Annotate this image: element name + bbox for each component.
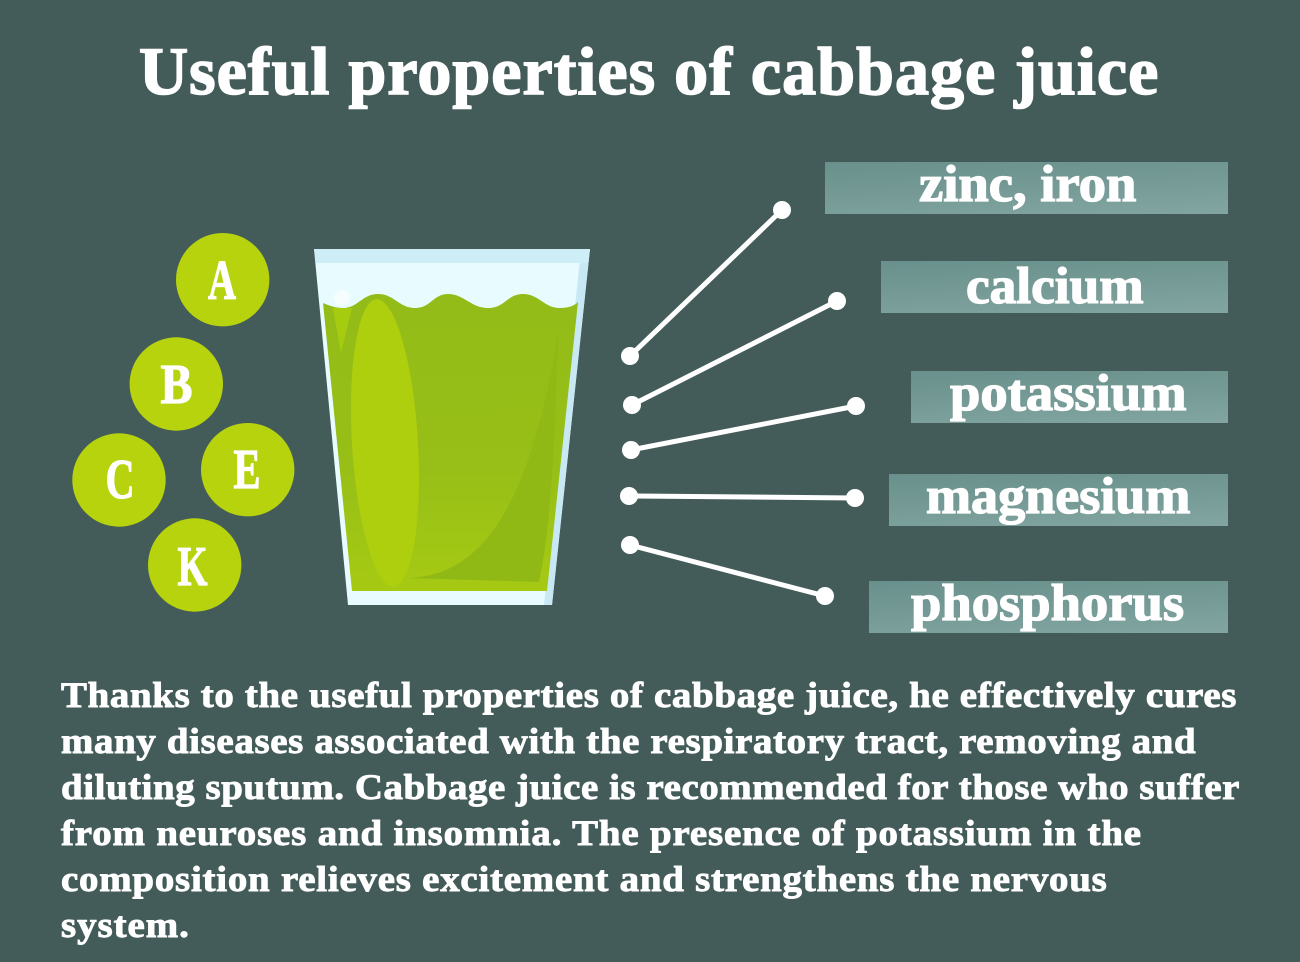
vitamin A: A <box>208 250 236 312</box>
vitamin E: E <box>234 439 260 501</box>
description text: from neuroses and insomnia. The presence of potassium in the <box>61 813 1142 853</box>
vitamin C: C <box>106 449 134 511</box>
vitamin K: K <box>178 536 208 598</box>
mineral label: potassium <box>911 371 1228 423</box>
mineral label: calcium: calcium <box>966 258 1144 315</box>
vitamin B: B <box>160 354 192 416</box>
vitamin C <box>72 433 166 527</box>
vitamin B <box>130 337 223 431</box>
connector to zinc, iron <box>621 201 791 365</box>
title: Useful properties of cabbage juice <box>139 33 1159 109</box>
mineral label: phosphorus: phosphorus <box>911 574 1184 632</box>
mineral label: calcium <box>881 261 1228 313</box>
mineral label: potassium: potassium <box>950 365 1187 422</box>
vitamin A <box>176 233 269 326</box>
connector to potassium <box>622 397 865 459</box>
description text: composition relieves excitement and strengthens the nervous <box>61 859 1108 899</box>
description text: Thanks to the useful properties of cabbage juice, he effectively cures <box>61 675 1237 715</box>
description text: many diseases associated with the respiratory tract, removing and <box>61 721 1196 761</box>
description text: system. <box>61 905 190 945</box>
description text <box>60 675 1240 945</box>
mineral label: zinc, iron: zinc, iron <box>919 156 1136 212</box>
mineral label: phosphorus <box>869 581 1228 633</box>
vitamin K <box>148 518 241 612</box>
mineral label: zinc, iron <box>825 162 1228 214</box>
connector to phosphorus <box>621 536 834 605</box>
mineral label: magnesium <box>889 474 1228 526</box>
vitamin E <box>201 423 294 516</box>
mineral label: magnesium: magnesium <box>926 468 1190 524</box>
connector to magnesium <box>620 487 864 507</box>
connector to calcium <box>623 292 846 414</box>
description text: diluting sputum. Cabbage juice is recommended for those who suffer <box>61 767 1240 807</box>
